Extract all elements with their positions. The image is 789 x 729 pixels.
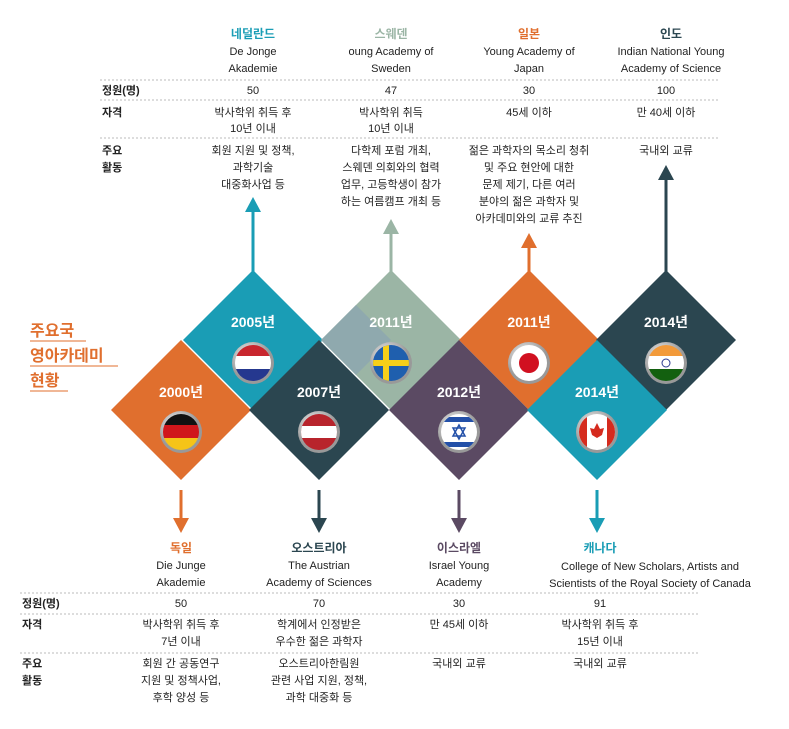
bottom table: 박사학위 취득 후	[143, 618, 219, 631]
bottom table: 오스트리아	[291, 541, 347, 555]
top table: 문제 제기, 다른 여러	[482, 178, 576, 191]
down arrows	[173, 490, 605, 533]
years: 2014년	[575, 384, 619, 400]
top table: 스웨덴	[374, 27, 408, 41]
top table: Academy of Science	[621, 63, 721, 75]
bottom table: Die Junge	[156, 560, 206, 572]
top table: 네덜란드	[231, 27, 275, 41]
title: 영아카데미	[30, 347, 104, 365]
title: 주요국	[30, 323, 74, 340]
flags	[160, 342, 687, 453]
bottom table: 91	[594, 598, 606, 610]
top table: 만 40세 이하	[637, 105, 695, 119]
years: 2007년	[297, 384, 341, 400]
bottom table: 7년 이내	[161, 635, 201, 648]
top table: 과학기술	[233, 161, 273, 174]
top table: 박사학위 취득	[359, 106, 423, 119]
bottom table: Scientists of the Royal Society of Canada	[549, 578, 752, 590]
top table: 10년 이내	[368, 122, 414, 135]
top table: 10년 이내	[230, 122, 276, 135]
bottom table: 과학 대중화 등	[286, 691, 352, 704]
bottom table: 학계에서 인정받은	[277, 618, 361, 631]
top table: 30	[523, 85, 535, 97]
bottom table: 국내외 교류	[573, 657, 627, 670]
top table: 주요	[102, 144, 122, 157]
bottom table: 독일	[170, 541, 192, 555]
top table: Akademie	[229, 63, 277, 75]
bottom table: 오스트리아한림원	[279, 657, 359, 670]
title	[30, 323, 118, 391]
top table: 45세 이하	[506, 105, 552, 119]
years	[159, 314, 688, 400]
title: 현황	[30, 372, 60, 390]
top table: 정원(명)	[102, 83, 140, 97]
bottom table: 정원(명)	[22, 596, 60, 610]
bottom table: 회원 간 공동연구	[143, 657, 219, 670]
up arrows	[245, 165, 674, 275]
top table: Indian National Young	[617, 46, 725, 58]
top table: 분야의 젊은 과학자 및	[479, 195, 579, 208]
bottom table	[22, 540, 752, 704]
top table: 50	[247, 85, 259, 97]
top table: 하는 여름캠프 개최 등	[341, 194, 441, 208]
bottom table: 캐나다	[583, 540, 617, 555]
top table: 인도	[660, 27, 682, 41]
bottom table: 70	[313, 598, 325, 610]
top table: 및 주요 현안에 대한	[484, 161, 574, 174]
bottom table: 30	[453, 598, 465, 610]
bottom table: 관련 사업 지원, 정책,	[271, 674, 367, 687]
bottom table: 만 45세 이하	[430, 617, 488, 631]
top table: De Jonge	[229, 46, 277, 58]
bottom table: 이스라엘	[437, 541, 481, 555]
top table: 다학제 포럼 개최,	[351, 144, 431, 157]
bottom table: Academy	[436, 577, 482, 589]
top table: 회원 지원 및 정책,	[211, 144, 295, 157]
bottom table: 15년 이내	[577, 635, 623, 648]
top table: 아카데미와의 교류 추진	[475, 212, 583, 225]
bottom table: 국내외 교류	[432, 657, 486, 670]
top table: 박사학위 취득 후	[215, 106, 291, 119]
top table: 일본	[518, 27, 540, 41]
bottom table: Akademie	[157, 577, 205, 589]
bottom table: 박사학위 취득 후	[562, 618, 638, 631]
bottom table: 자격	[22, 618, 42, 631]
top table: Young Academy of	[483, 46, 576, 58]
bottom table: 우수한 젊은 과학자	[275, 635, 363, 648]
bottom table: 지원 및 정책사업,	[141, 674, 221, 687]
top table: 100	[657, 85, 675, 97]
years: 2000년	[159, 384, 203, 400]
top table: 업무, 고등학생이 참가	[341, 178, 441, 191]
top table: 47	[385, 85, 397, 97]
years: 2011년	[369, 314, 413, 330]
bottom table: Israel Young	[429, 560, 489, 572]
top table: 젊은 과학자의 목소리 청취	[469, 144, 589, 157]
years: 2012년	[437, 384, 481, 400]
bottom table: 활동	[22, 673, 42, 687]
top table: Japan	[514, 63, 544, 75]
top table: 국내외 교류	[639, 144, 693, 157]
bottom table: The Austrian	[288, 560, 350, 572]
top table: 활동	[102, 160, 122, 174]
bottom table: Academy of Sciences	[266, 577, 372, 589]
top table: 대중화사업 등	[221, 178, 285, 191]
years: 2014년	[644, 314, 688, 330]
years: 2011년	[507, 314, 551, 330]
bottom table: 주요	[22, 657, 42, 670]
top table: 자격	[102, 106, 122, 119]
top table	[102, 27, 725, 225]
bottom table: College of New Scholars, Artists and	[561, 561, 739, 573]
diamonds	[111, 270, 736, 480]
bottom table: 50	[175, 598, 187, 610]
top table: 스웨덴 의회와의 협력	[342, 161, 440, 174]
years: 2005년	[231, 314, 275, 330]
top table: oung Academy of	[348, 46, 434, 58]
top table: Sweden	[371, 63, 411, 75]
bottom table: 후학 양성 등	[153, 691, 209, 704]
